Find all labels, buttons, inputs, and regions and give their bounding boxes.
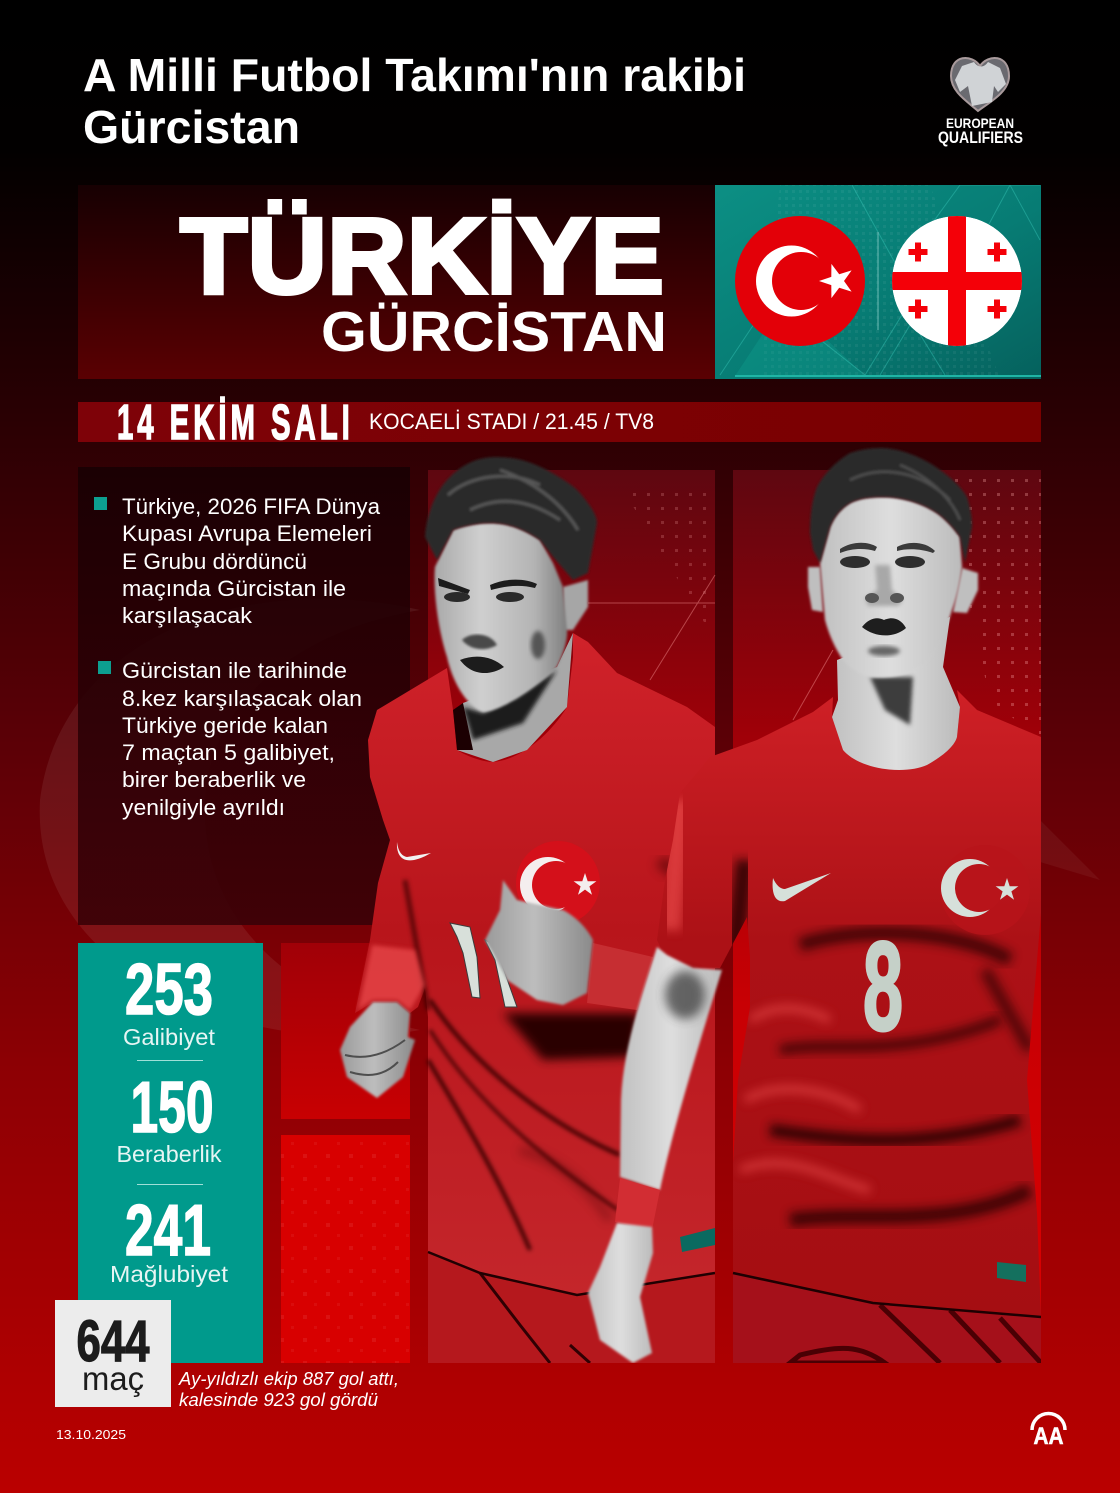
stat: losses: Mağlubiyet — [110, 1261, 229, 1287]
title: Gürcistan — [83, 101, 300, 153]
panel: flags — [715, 185, 1041, 379]
player left shorts — [428, 1252, 715, 1363]
player left hair — [425, 457, 597, 580]
player left face — [435, 523, 567, 712]
note two: Türkiye geride kalan — [122, 713, 328, 738]
player left fist shading — [345, 1040, 405, 1075]
note one: Türkiye, 2026 FIFA Dünya — [122, 494, 381, 519]
match date: 14 EKİM SALI — [117, 394, 350, 450]
player right facial features — [840, 543, 935, 656]
player: number 8 — [588, 448, 1041, 1363]
stat: losses — [110, 1191, 229, 1287]
logo: AA: AA — [1034, 1423, 1064, 1450]
note two: Gürcistan ile tarihinde — [122, 658, 347, 683]
panel: red block centre — [428, 470, 715, 1363]
goals note — [178, 1369, 399, 1410]
stat: wins — [123, 950, 216, 1050]
player right shorts — [733, 1273, 1041, 1363]
note one: karşılaşacak — [122, 603, 253, 628]
panel: red block small bottom — [281, 1135, 410, 1363]
stat: draws: Beraberlik — [116, 1141, 222, 1167]
goals note: kalesinde 923 gol gördü — [179, 1390, 378, 1410]
title — [83, 49, 746, 153]
title: A Milli Futbol Takımı'nın rakibi — [83, 49, 746, 101]
note one: Kupası Avrupa Elemeleri — [122, 521, 372, 546]
bullet — [98, 661, 111, 674]
player left jersey folds — [405, 860, 715, 1295]
player right jersey folds — [670, 800, 1030, 1220]
player right ears — [808, 567, 978, 613]
note two: birer beraberlik ve — [122, 767, 306, 792]
player right hair — [810, 448, 972, 563]
player right face — [820, 497, 962, 678]
panel: red block small top — [281, 943, 410, 1119]
player right neck — [832, 617, 960, 770]
note two — [122, 658, 362, 820]
player right jersey — [657, 690, 1041, 1317]
logo: AA — [1032, 1414, 1065, 1450]
stat: wins: 253 — [125, 950, 213, 1030]
player right wristband — [615, 1178, 660, 1230]
callout: total matches: maç — [82, 1360, 144, 1397]
player: number 11 — [340, 457, 715, 1363]
player left ear — [563, 580, 588, 630]
stat: losses: 241 — [125, 1191, 211, 1271]
player left sleeve highlight — [358, 945, 425, 1010]
note one: E Grubu dördüncü — [122, 549, 307, 574]
logo: European Qualifiers: EUROPEAN — [946, 115, 1014, 131]
stat: draws — [116, 1068, 222, 1167]
player right hem — [733, 1273, 1041, 1317]
panel: match banner — [78, 185, 715, 379]
goals note: Ay-yıldızlı ekip 887 gol attı, — [178, 1369, 399, 1389]
note two: 7 maçtan 5 galibiyet, — [122, 740, 335, 765]
player left shirt number — [450, 923, 517, 1007]
stat: wins: Galibiyet — [123, 1024, 216, 1050]
player left sleeve on chest — [587, 943, 653, 1010]
player left facial features — [438, 578, 545, 673]
panel: stats — [78, 943, 263, 1363]
venue and time: KOCAELİ STADI / 21.45 / TV8 — [369, 409, 654, 434]
callout: total matches — [55, 1300, 171, 1407]
player right shirt label — [997, 1262, 1026, 1282]
logo: European Qualifiers — [938, 58, 1023, 147]
player right shirt number: 8 — [863, 916, 903, 1057]
icon: Turkish flag — [735, 216, 865, 346]
player right hand — [588, 1223, 653, 1363]
player left swoosh — [397, 842, 431, 860]
team name: Gürcistan: GÜRCİSTAN — [321, 300, 667, 364]
date: 13.10.2025 — [56, 1427, 126, 1442]
panel: red block right — [733, 470, 1041, 1363]
player left fist — [340, 1002, 415, 1098]
note one — [122, 494, 381, 628]
stat: draws: 150 — [130, 1068, 214, 1148]
player left jersey — [355, 633, 715, 1295]
callout: total matches: 644 — [76, 1309, 150, 1374]
icon: Georgian flag — [892, 216, 1022, 346]
logo: European Qualifiers: QUALIFIERS — [938, 128, 1023, 147]
player left shirt label — [680, 1228, 715, 1252]
player left chest shadow — [503, 1013, 640, 1060]
player left hand on chest — [485, 880, 593, 1005]
player right swoosh — [773, 873, 831, 901]
team name: Türkiye: TÜRKİYE — [180, 195, 664, 316]
panel: text notes — [78, 467, 410, 925]
player left badge — [516, 841, 600, 925]
note one: maçında Gürcistan ile — [122, 576, 346, 601]
bullet — [94, 497, 107, 510]
player right badge — [941, 859, 1018, 935]
note two: 8.kez karşılaşacak olan — [122, 686, 362, 711]
player left neck — [453, 633, 573, 762]
note two: yenilgiyle ayrıldı — [122, 795, 285, 820]
player right forearm — [620, 947, 722, 1190]
panel: date bar — [78, 394, 1041, 450]
